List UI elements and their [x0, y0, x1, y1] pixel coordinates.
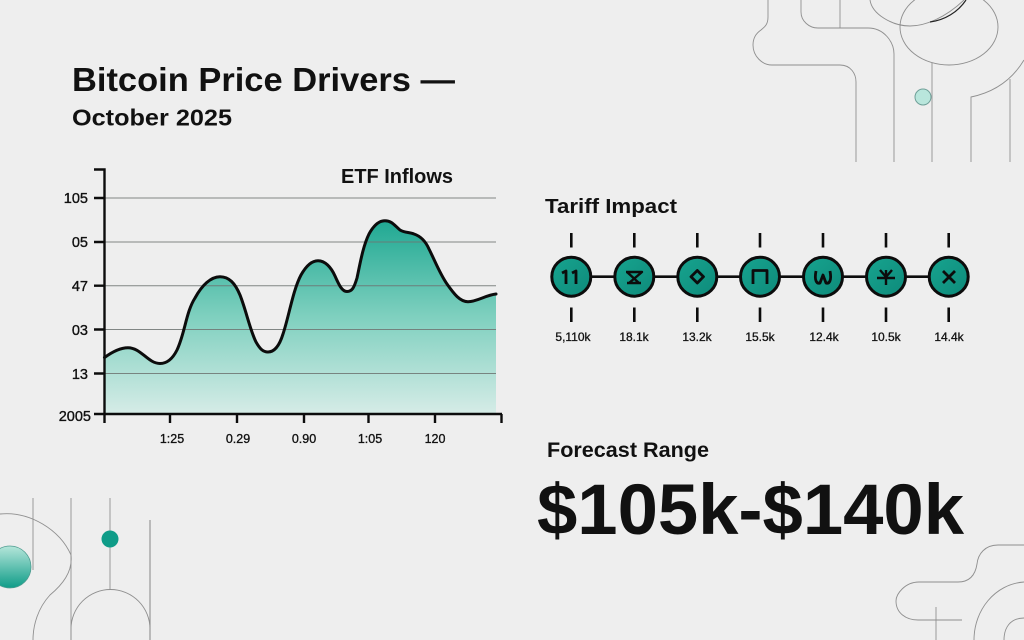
- subtitle: October 2025: [72, 104, 232, 130]
- price line: [104, 221, 496, 364]
- y axis labels: 105: [64, 191, 88, 207]
- y axis labels: [59, 191, 91, 425]
- value labels: 18.1k: [619, 330, 650, 344]
- value labels: 14.4k: [934, 330, 965, 344]
- decoration: bottom left line art: [0, 498, 150, 640]
- axes and ticks: [94, 170, 502, 423]
- y axis labels: 13: [72, 367, 88, 383]
- title: [72, 61, 455, 130]
- chart title: ETF Inflows: [341, 166, 453, 188]
- value labels: 15.5k: [745, 330, 776, 344]
- y axis labels: 05: [72, 235, 88, 251]
- grid lines: [104, 198, 496, 374]
- value labels: 10.5k: [871, 330, 902, 344]
- panel: Forecast Range: [537, 438, 965, 550]
- heading: Tariff Impact: [545, 195, 677, 218]
- connector and ticks: [571, 233, 949, 322]
- title: Bitcoin Price Drivers —: [72, 61, 455, 98]
- x axis labels: 120: [425, 432, 445, 446]
- timeline nodes: [552, 257, 968, 296]
- panel: Tariff Impact: [545, 195, 968, 344]
- y axis labels: 03: [72, 323, 88, 339]
- y axis labels: 47: [72, 279, 88, 295]
- value labels: 13.2k: [682, 330, 713, 344]
- decoration: bottom right line art: [896, 545, 1024, 640]
- node glyphs: [562, 270, 955, 285]
- x axis labels: 0.29: [226, 432, 250, 446]
- x axis labels: [160, 432, 445, 446]
- value labels: 12.4k: [809, 330, 840, 344]
- area fill: [104, 221, 496, 414]
- heading: Forecast Range: [547, 438, 709, 462]
- x axis labels: 1:25: [160, 432, 184, 446]
- icon: dark teal dot: [102, 530, 118, 548]
- y axis labels: 2005: [59, 409, 91, 425]
- decoration: top right line art: [753, 0, 1024, 162]
- value labels: 5,110k: [555, 330, 592, 344]
- icon: gradient teal ball: [0, 546, 31, 588]
- big number: $105k-$140k: [537, 471, 965, 550]
- x axis labels: 0.90: [292, 432, 316, 446]
- icon: pale teal dot: [915, 89, 931, 105]
- value labels: [555, 330, 965, 344]
- x axis labels: 1:05: [358, 432, 382, 446]
- area chart: ETF Inflows: [59, 166, 502, 446]
